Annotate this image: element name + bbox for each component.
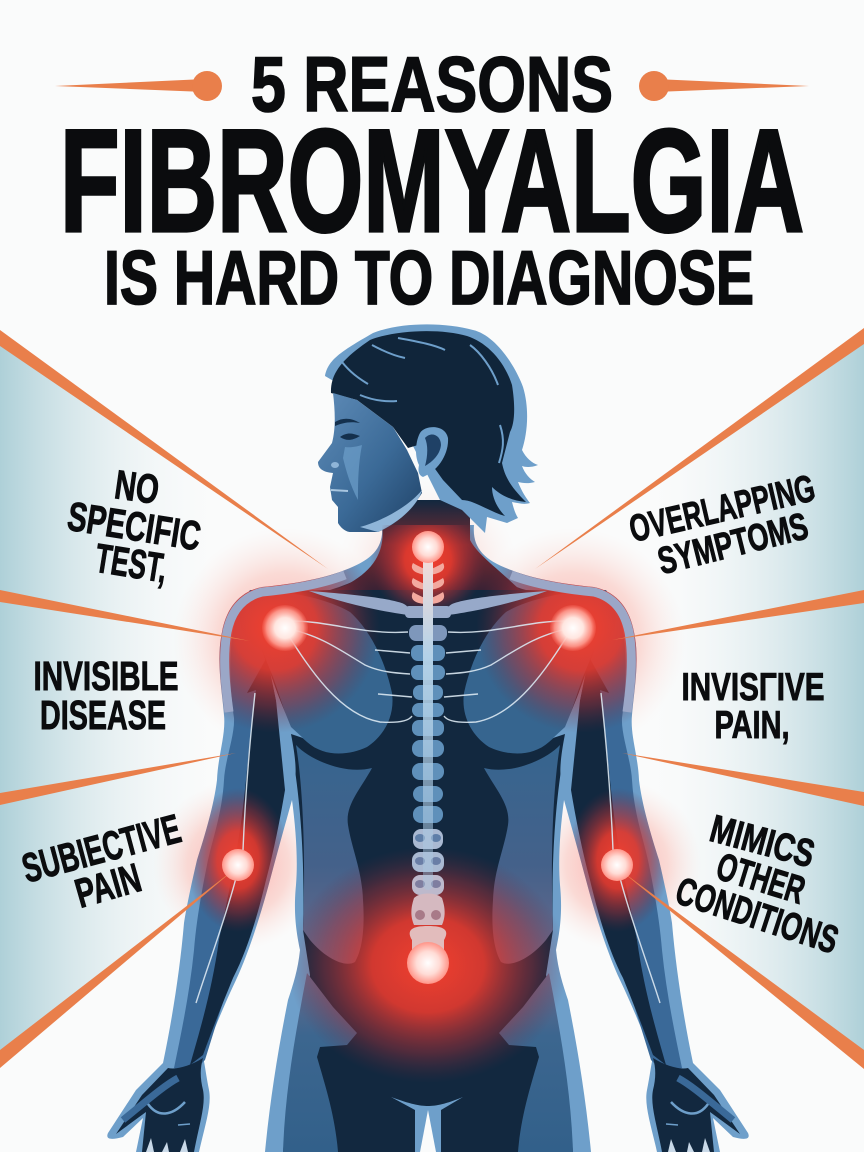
pain point: right shoulder [550,605,596,651]
neck pain glow [372,525,484,606]
inner leg gap [420,1110,436,1152]
jaw highlight [360,490,422,532]
orange connector rays [0,328,864,1069]
label: no specific test [64,461,204,592]
hair outer silhouette [325,324,538,533]
cervical vertebrae [412,563,444,604]
label: invisible disease: INVISIBLE [34,653,178,699]
spine [409,555,447,950]
cheek highlight [343,445,362,500]
label: invisible disease: DISEASE [40,692,166,738]
label: subjective pain [17,805,186,917]
label: invasive pain: PAIN, [714,704,790,747]
panel: right teal wedge [535,338,864,1058]
pain halos behind body [153,480,702,950]
title decoration: left pin [55,71,222,101]
pain point: neck [412,531,444,563]
title decoration: right pin [639,71,809,101]
label: mimics other conditions [670,807,843,963]
title: 5 REASONS [251,40,613,128]
hair highlights [342,338,503,463]
brow [335,419,360,426]
label: mimics other conditions: OTHER [711,845,810,913]
title [60,40,804,321]
lower vertebrae [410,829,446,950]
label: invisible disease [34,653,178,738]
hair [331,331,526,516]
face [318,393,422,532]
thoracic and lumbar vertebrae [409,625,447,823]
shoulder outline tint [225,575,631,712]
pain point: left shoulder [262,605,308,651]
label: subjective pain: SUBIECTIVE [17,805,186,892]
neck with red glow [336,500,520,590]
label: no specific test: SPECIFIC [64,493,204,559]
label: subjective pain: PAIN [70,854,146,917]
nose [331,462,339,468]
panel: left teal wedge [0,338,330,1058]
label: invasive pain [682,666,824,747]
mouth [331,490,348,491]
body figure [107,525,749,1152]
label: mimics other conditions: MIMICS [705,807,819,876]
crotch highlight [391,1097,463,1152]
lumbar pain glow [288,847,568,1083]
nerve lines [196,621,660,1003]
eye [340,434,360,440]
pain point: right elbow [601,849,633,881]
shoulder and elbow pain glows [192,566,664,928]
clavicles [309,591,547,618]
spinal column line [423,555,433,890]
label: no specific test: TEST, [92,535,170,592]
pain point: left elbow [222,849,254,881]
label: no specific test: NO [112,461,162,513]
label: overlapping symptoms [625,468,819,583]
ear [416,427,448,477]
pain point: lower back [407,942,449,984]
